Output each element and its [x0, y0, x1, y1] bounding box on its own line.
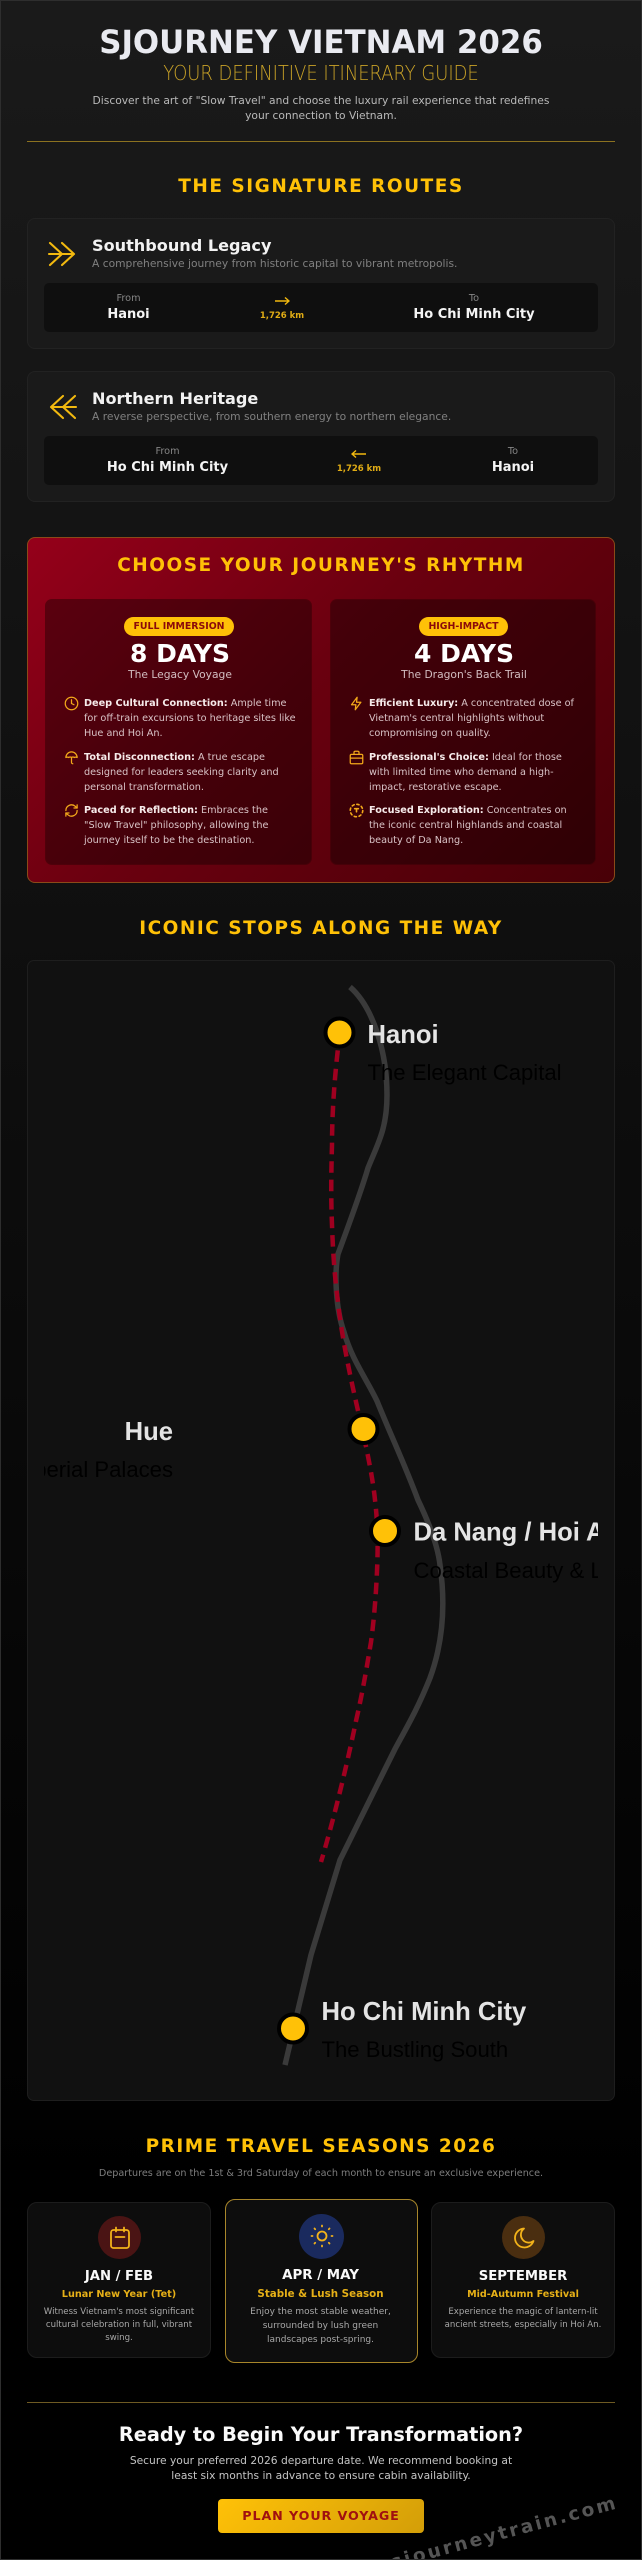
heading: CHOOSE YOUR JOURNEY'S RHYTHM: [117, 555, 525, 576]
card: jan feb: [27, 2202, 211, 2358]
item: efficient luxury: Vietnam's central highlights without: [369, 713, 544, 724]
express dashed route: [321, 1032, 378, 1862]
item: total disconnection: designed for leaders seeking clarity and: [84, 766, 279, 778]
call to action text: [130, 2454, 512, 2482]
tagline: The Legacy Voyage: [128, 668, 232, 681]
icon: lightning: [350, 696, 362, 710]
season highlight: Lunar New Year (Tet): [62, 2288, 176, 2300]
heading: iconic stops: ICONIC STOPS ALONG THE WAY: [139, 918, 503, 938]
stop: hanoi: Hanoi: [368, 1021, 439, 1049]
item: total disconnection: Total Disconnection: A true escape: [84, 752, 265, 762]
icon: refresh: [65, 804, 78, 817]
icon: moon: [502, 2216, 545, 2259]
icon: palm tree: [65, 751, 78, 764]
card: apr may: [224, 2199, 418, 2362]
item: efficient luxury: [350, 696, 574, 739]
item: focused exploration: Focused Exploration: Concentrates on: [369, 805, 567, 816]
stop: hanoi: The Elegant Capital: [368, 1060, 562, 1085]
route strip: [44, 436, 598, 485]
intro text: Discover the art of "Slow Travel" and choose the luxury rail experience that redefines: [93, 94, 549, 107]
to: hanoi: [492, 446, 534, 475]
call to action text: least six months in advance to ensure cabin availability.: [171, 2468, 471, 2482]
item: total disconnection: personal transformation.: [84, 782, 204, 792]
season description: [44, 2307, 194, 2343]
coastline track: [285, 987, 443, 2065]
panel: northern heritage: [27, 371, 615, 502]
season name: APR / MAY: [282, 2268, 359, 2282]
subtitle: YOUR DEFINITIVE ITINERARY GUIDE: [163, 61, 479, 85]
stop: hue: [10, 1415, 378, 1482]
duration: 4 DAYS: [414, 639, 514, 668]
route name: Northern Heritage: [92, 389, 258, 408]
item: focused exploration: beauty of Da Nang.: [369, 835, 463, 846]
card: 8 days: [45, 599, 312, 865]
route description: A comprehensive journey from historic capital to vibrant metropolis.: [92, 257, 457, 270]
arrow and distance: 1,726 km: [260, 311, 304, 321]
stop: ho chi minh city: The Bustling South: [322, 2037, 508, 2062]
item: deep cultural connection: [64, 696, 296, 739]
icon: double arrow right: [48, 242, 76, 266]
icon: dashed focus: [349, 804, 364, 818]
card: 4 days: [330, 599, 596, 865]
item: focused exploration: [349, 804, 567, 846]
route name: Southbound Legacy: [92, 236, 271, 255]
item: deep cultural connection: for off-train excursions to heritage sites like: [84, 713, 296, 724]
route strip: [44, 283, 598, 332]
button: plan your voyage: [218, 2499, 424, 2533]
stop: ho chi minh city: [279, 1998, 527, 2062]
call to action text: Secure your preferred 2026 departure date. We recommend booking at: [130, 2454, 512, 2466]
season description: swing.: [105, 2333, 133, 2343]
icon: sun: [299, 2214, 344, 2258]
from: hanoi: [107, 293, 150, 322]
panel: southbound legacy: [27, 218, 615, 349]
to: ho chi minh city: Ho Chi Minh City: [413, 307, 535, 322]
item: focused exploration: the iconic central highlands and coastal: [369, 820, 562, 831]
intro text: your connection to Vietnam.: [245, 109, 397, 122]
badge: [419, 617, 508, 636]
stop: da nang: [371, 1517, 642, 1583]
item: professional's choice: impact, restorative escape.: [369, 782, 502, 792]
item: total disconnection: [65, 751, 279, 792]
tagline: The Dragon's Back Trail: [401, 668, 527, 681]
seasons note: Departures are on the 1st & 3rd Saturday of each month to ensure an exclusive experience.: [99, 2168, 543, 2178]
panel: journey rhythm: [27, 537, 615, 883]
item: deep cultural connection: Deep Cultural Connection: Ample time: [84, 698, 287, 709]
to: ho chi minh city: [413, 293, 535, 322]
route map: [44, 985, 598, 2066]
season highlight: Mid-Autumn Festival: [467, 2288, 579, 2300]
button: plan your voyage: PLAN YOUR VOYAGE: [242, 2508, 400, 2523]
from: hanoi: Hanoi: [107, 307, 150, 322]
icon: double arrow left: [50, 394, 77, 420]
icon: calendar: [98, 2216, 141, 2259]
heading: travel seasons: PRIME TRAVEL SEASONS 2026: [146, 2136, 496, 2157]
season description: [250, 2307, 391, 2345]
to: hanoi: To: [508, 446, 518, 457]
arrow and distance: 1,726 km: [337, 464, 381, 474]
icon: clock: [64, 696, 78, 710]
item: paced for reflection: [65, 804, 268, 846]
season description: Witness Vietnam's most significant: [44, 2307, 194, 2317]
season description: [445, 2307, 601, 2330]
arrow and distance: [337, 450, 381, 474]
item: paced for reflection: "Slow Travel" philosophy, allowing the: [84, 820, 268, 831]
duration: 8 DAYS: [130, 639, 230, 668]
card: september: [431, 2202, 615, 2358]
to: ho chi minh city: To: [469, 293, 479, 304]
to: hanoi: Hanoi: [492, 460, 534, 475]
season description: Experience the magic of lantern-lit: [448, 2307, 598, 2317]
season description: landscapes post-spring.: [267, 2335, 374, 2345]
item: professional's choice: Professional's Choice: Ideal for those: [369, 752, 562, 762]
stop: hue: Hue: [125, 1418, 173, 1446]
season description: cultural celebration in full, vibrant: [46, 2320, 192, 2330]
item: deep cultural connection: Hue and Hoi An.: [84, 728, 163, 739]
panel: route map: [27, 960, 615, 2101]
item: efficient luxury: Efficient Luxury: A concentrated dose of: [369, 698, 574, 709]
header: [93, 23, 549, 122]
stop: ho chi minh city: Ho Chi Minh City: [322, 1998, 527, 2026]
arrow and distance: [260, 297, 304, 321]
item: efficient luxury: compromising on quality.: [369, 728, 491, 739]
season description: Enjoy the most stable weather,: [250, 2307, 391, 2317]
item: professional's choice: [350, 750, 562, 792]
from: ho chi minh city: From: [156, 446, 180, 457]
icon: briefcase: [350, 750, 364, 764]
season name: SEPTEMBER: [479, 2268, 567, 2284]
title: SJOURNEY VIETNAM 2026: [99, 23, 543, 61]
from: ho chi minh city: [107, 446, 228, 475]
item: paced for reflection: journey itself to be the destination.: [84, 835, 254, 846]
from: hanoi: From: [116, 293, 140, 304]
stop: hanoi: [326, 1018, 562, 1085]
route description: A reverse perspective, from southern energy to northern elegance.: [92, 410, 451, 423]
badge: HIGH-IMPACT: [428, 621, 499, 632]
season description: ancient streets, especially in Hoi An.: [445, 2320, 601, 2330]
badge: [124, 617, 234, 636]
badge: FULL IMMERSION: [133, 621, 225, 632]
intro text: [93, 94, 549, 122]
item: paced for reflection: Paced for Reflection: Embraces the: [84, 805, 268, 816]
heading: signature routes: THE SIGNATURE ROUTES: [178, 176, 464, 196]
season name: JAN / FEB: [85, 2268, 153, 2284]
call to action title: Ready to Begin Your Transformation?: [119, 2422, 523, 2446]
season highlight: Stable & Lush Season: [257, 2288, 384, 2300]
season description: surrounded by lush green: [263, 2321, 378, 2331]
item: professional's choice: with limited time who demand a high-: [369, 766, 554, 778]
from: ho chi minh city: Ho Chi Minh City: [107, 460, 228, 475]
